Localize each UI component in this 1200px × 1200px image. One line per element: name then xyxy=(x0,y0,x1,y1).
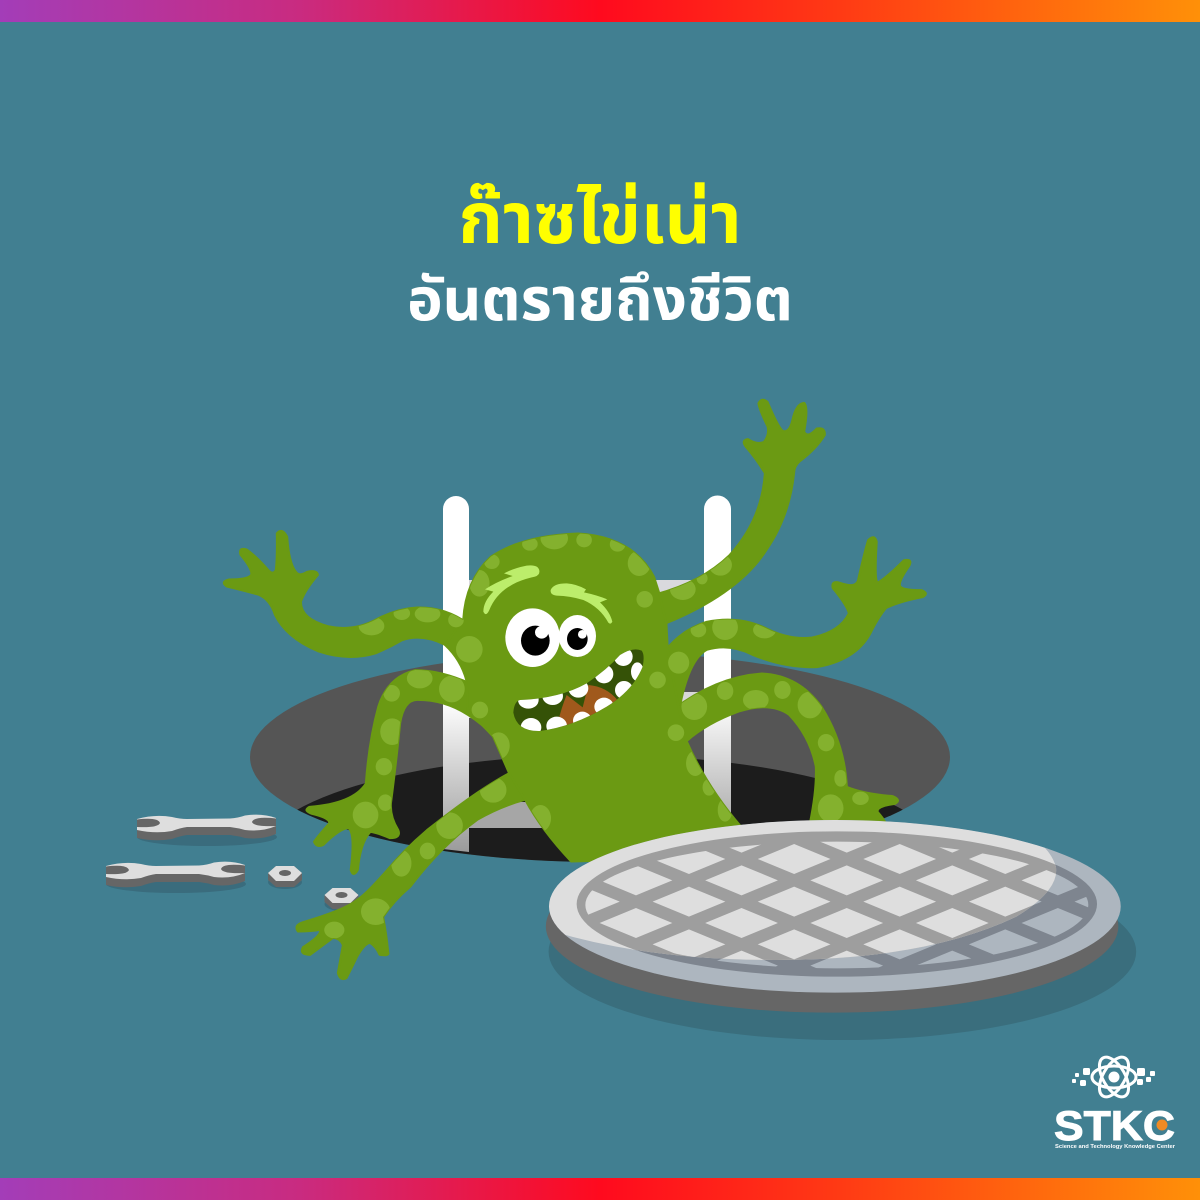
wrench lower xyxy=(106,862,246,893)
title: ก๊าซไข่เน่า xyxy=(459,180,741,259)
eyebrow left xyxy=(483,565,539,614)
eye left xyxy=(505,608,560,667)
cover lit face xyxy=(549,820,1056,960)
hex nut 2 xyxy=(324,888,358,911)
ladder xyxy=(443,496,731,855)
logo wordmark: STKC xyxy=(1054,1102,1175,1149)
logo dots xyxy=(1072,1068,1155,1086)
green monster xyxy=(224,400,926,979)
eyebrow right xyxy=(551,583,612,624)
STKC logo xyxy=(1054,1052,1176,1150)
wrench upper xyxy=(137,815,277,846)
logo orange dot xyxy=(1156,1120,1168,1130)
monster face xyxy=(483,565,644,737)
cover shaded face xyxy=(547,820,1147,993)
monster arms and body xyxy=(224,400,926,979)
manhole cover xyxy=(546,820,1147,1040)
cover side xyxy=(546,840,1118,1013)
logo atom icon xyxy=(1092,1052,1136,1102)
mouth xyxy=(513,647,644,737)
cover ground shadow xyxy=(549,863,1136,1040)
manhole hole xyxy=(250,656,950,862)
subtitle: อันตรายถึงชีวิต xyxy=(407,266,793,333)
hex nut 1 xyxy=(268,866,302,889)
top gradient bar xyxy=(0,0,1200,22)
eye right xyxy=(559,615,596,657)
bottom gradient bar xyxy=(0,1178,1200,1200)
monster spots xyxy=(324,527,869,938)
logo caption: Science and Technology Knowledge Center xyxy=(1055,1144,1176,1150)
